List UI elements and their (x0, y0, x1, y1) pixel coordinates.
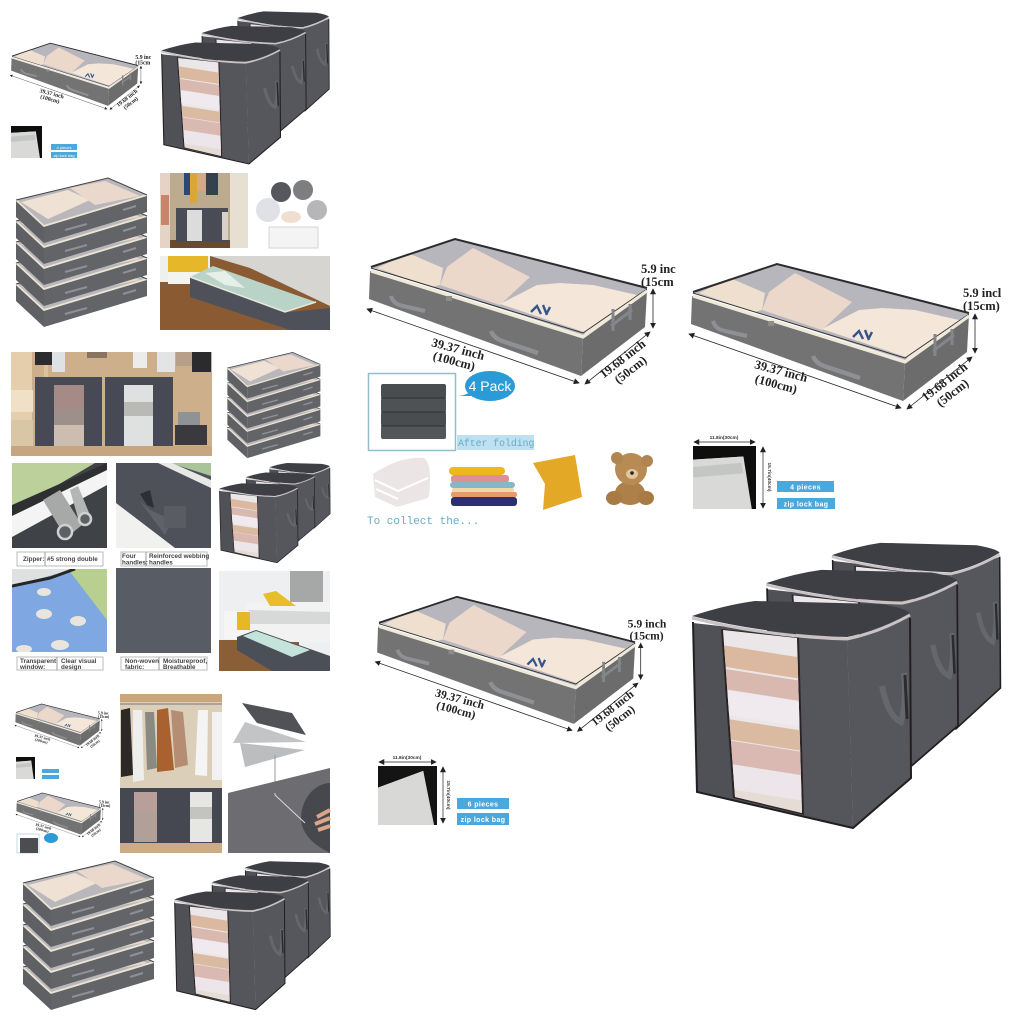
mini product sheet 2: 5.9 inc (99, 800, 110, 804)
mini product sheet 1: (50cm) (89, 738, 101, 749)
label: 6 pieces: 6 pieces (468, 802, 498, 808)
dimension labels (434, 617, 667, 734)
caption: zipper: #5 strong double (47, 556, 98, 563)
icon: teddy bear (606, 452, 654, 505)
product set 1: three cube bags (157, 11, 329, 170)
dimension labels: 5.9 inc (641, 262, 676, 276)
dimension labels: 39.37 inch (753, 357, 809, 385)
zip lock bag photo with dimensions: 11.8in(30cm) (710, 435, 739, 441)
photo: transparent window (12, 569, 107, 652)
zip lock bag photo with dimensions: 11.8in(30cm) (393, 755, 422, 761)
label: after folding: After folding (458, 438, 535, 449)
caption: handles: handles (149, 560, 173, 566)
caption: window: window: (19, 664, 45, 671)
product set 1: flat bag with dimensions: 5.9 inc (135, 55, 152, 61)
caption: window: Clear visual (61, 658, 97, 665)
product set 1: flat bag with dimensions: (50cm) (122, 95, 140, 111)
caption: fabric: Moistureproof, (163, 658, 207, 665)
dimension labels (753, 286, 1002, 410)
small zip lock bag thumbnail: zip lock bag (53, 153, 75, 158)
caption: to collect: To collect the... (367, 516, 479, 528)
dimension labels: (15cm (641, 275, 674, 289)
photo: fabric texture (116, 568, 211, 653)
large product: three cube bags (685, 543, 1000, 840)
caption: window (17, 657, 103, 671)
mini product sheet 1 (15, 704, 110, 749)
caption: fabric: fabric: (125, 664, 144, 671)
product set 1: flat bag with dimensions (10, 43, 152, 111)
caption: fabric: Non-woven (125, 658, 159, 665)
photo: hanging clothes above bags (120, 694, 222, 853)
small zip lock bag thumbnail: 4 pieces (57, 145, 71, 150)
product set 1: flat bag with dimensions: (15cm (135, 60, 151, 67)
dimension labels: (15cm) (630, 629, 664, 642)
icon: white duvet (373, 458, 430, 507)
label: zip lock bag: zip lock bag (784, 502, 828, 508)
folded bags box (368, 374, 456, 450)
zip lock bag photo with dimensions (378, 755, 451, 825)
mini folded bags with pack bubble (17, 833, 58, 853)
large product: flat bag with zip lock (689, 264, 1002, 410)
label: zip lock bag: zip lock bag (461, 817, 505, 824)
mini product sheet 1: (15cm) (98, 715, 110, 719)
zip lock bag photo with dimensions: 15.7in(40cm) (445, 780, 451, 810)
mini product sheet 2: 39.37 inch (35, 823, 53, 831)
caption: fabric: Breathable (163, 664, 196, 671)
dimension labels: (100cm) (431, 349, 477, 373)
dimension labels: (100cm) (753, 372, 799, 396)
photo: side handle (116, 463, 211, 548)
large product: flat bag 6 pieces (375, 597, 667, 734)
photo: bag under bed (160, 256, 330, 330)
large product: flat bag 4 pack (367, 239, 676, 387)
dimension labels: (50cm) (934, 376, 971, 410)
mini product sheet 1: 5.9 inc (98, 711, 109, 715)
caption: fabric (121, 657, 207, 671)
callout: 4 Pack: 4 Pack (469, 378, 512, 394)
photo: two bags on closet shelf (11, 352, 212, 456)
caption: handles: handles: (122, 560, 148, 566)
small zip lock bag thumbnail (11, 126, 77, 158)
label: 4 pieces (777, 481, 834, 492)
dimension labels: (100cm) (435, 699, 477, 722)
dimension labels: 39.37 inch (430, 335, 486, 363)
dimension labels: (50cm) (612, 353, 649, 387)
caption: window: design (61, 664, 81, 671)
mini product sheet 2 (16, 793, 111, 838)
dimension labels: 19.68 inch (919, 360, 970, 404)
label: 6 pieces (457, 798, 509, 809)
dimension labels: 5.9 inch (628, 617, 667, 630)
product set 1: flat bag with dimensions: (100cm) (40, 93, 60, 105)
mini product sheet 2: (100cm) (35, 827, 50, 834)
dimension labels: 39.37 inch (434, 686, 486, 712)
product set 1: flat bag with dimensions: 19.68 inch (116, 88, 140, 109)
dimension labels: 5.9 incl (963, 286, 1002, 300)
dimension labels (430, 262, 676, 387)
mini product sheet 1: 19.68 inch (85, 733, 101, 747)
photo: bag in closet (160, 173, 248, 248)
caption: handles: Four (122, 553, 137, 560)
caption: zipper (17, 552, 103, 566)
stack of five flat bags, bottom (23, 861, 154, 1010)
mini product sheet 2: (50cm) (90, 827, 102, 838)
icon: yellow pillow (533, 455, 582, 510)
callout: 4 Pack (458, 371, 515, 401)
photo: bed with bag underneath (219, 571, 330, 671)
zip lock bag photo with dimensions: 15.7in(40cm) (766, 462, 772, 492)
label: zip lock bag (457, 813, 509, 825)
photo: double zipper (12, 463, 107, 548)
mini product sheet 1: 39.37 inch (34, 734, 52, 742)
product set 1: flat bag with dimensions: 39.37 inch (39, 88, 65, 101)
dimension labels: (50cm) (603, 703, 638, 734)
stack of five flat bags, small (227, 352, 320, 458)
photo: accessory details (256, 180, 327, 248)
stack of three cube bags, bottom (170, 861, 330, 1016)
caption: window: Transparent (20, 658, 57, 665)
stack of three cube bags, small (216, 463, 330, 567)
dimension labels: 19.68 inch (597, 337, 648, 381)
mini product sheet 2: (15cm) (99, 804, 111, 808)
photo: fabric layers diagram (228, 703, 330, 853)
mini product sheet 2: 19.68 inch (86, 822, 102, 836)
mini product sheet 1: (100cm) (34, 738, 49, 745)
icon: folded clothes (449, 467, 517, 506)
label: zip lock bag (777, 498, 835, 509)
dimension labels: 19.68 inch (589, 687, 637, 729)
zip lock bag photo with dimensions (693, 435, 772, 509)
mini zip lock thumbnail (16, 757, 59, 779)
label: 4 pieces: 4 pieces (790, 484, 821, 492)
caption: handles: Reinforced webbing (149, 553, 209, 560)
caption: handles (121, 552, 209, 566)
stack of five flat bags (16, 178, 147, 327)
dimension labels: (15cm) (963, 299, 1000, 313)
caption: zipper: Zipper: (23, 556, 44, 563)
